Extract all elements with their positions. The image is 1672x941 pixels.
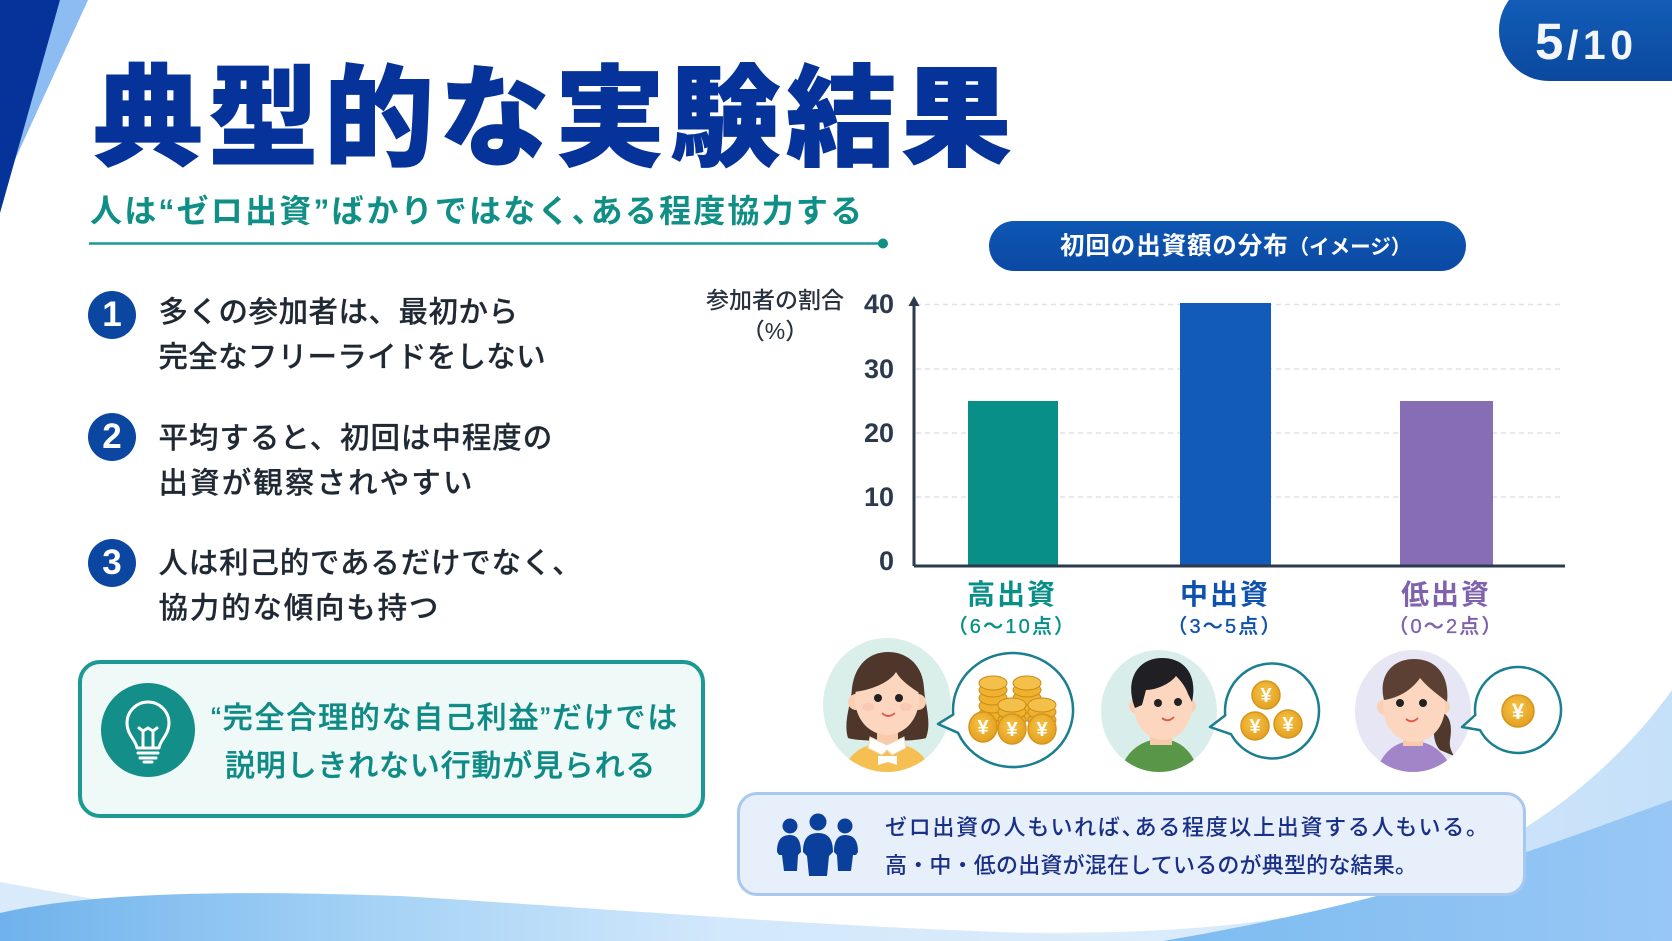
label: low: 低出資 <box>1401 579 1491 610</box>
icon: people <box>776 814 858 876</box>
speech bubble: many coins: ¥ <box>1006 719 1018 741</box>
speech bubble: many coins: ¥ <box>977 717 989 739</box>
axis numbers: 40 <box>864 289 894 319</box>
person: low contributor <box>1355 650 1471 775</box>
axis numbers: 30 <box>864 354 894 384</box>
page badge: /10 <box>1567 22 1638 68</box>
y axis label: （%） <box>742 318 808 344</box>
y axis label: 参加者の割合 <box>706 287 844 313</box>
category labels <box>948 579 1504 638</box>
speech bubble: three coins: ¥ <box>1249 716 1261 738</box>
speech bubble: three coins <box>1210 663 1319 758</box>
axis numbers: 0 <box>879 546 894 576</box>
point 2: 出資が観察されやすい <box>158 467 475 500</box>
person: middle contributor <box>1101 650 1217 775</box>
person: high contributor <box>823 638 951 775</box>
point 3 <box>88 539 582 625</box>
label: middle <box>1167 579 1283 638</box>
speech bubble: one coin <box>1462 667 1561 753</box>
axis arrow <box>908 296 920 306</box>
corner accent <box>0 0 88 213</box>
label: middle: 中出資 <box>1180 579 1270 610</box>
summary text: 高・中・低の出資が混在しているのが典型的な結果。 <box>885 853 1417 878</box>
callout text: 説明しきれない行動が見られる <box>225 750 656 783</box>
label: middle: （3～5点） <box>1167 616 1283 638</box>
chart title pill <box>989 221 1466 271</box>
list of key points <box>88 291 582 625</box>
axis numbers <box>864 289 894 576</box>
label: high: （6～10点） <box>948 616 1076 638</box>
callout text <box>211 702 679 783</box>
speech bubble: one coin: ¥ <box>1512 699 1525 724</box>
callout text: “完全合理的な自己利益”だけでは <box>211 702 679 735</box>
summary text <box>885 815 1490 878</box>
point 2: 平均すると、初回は中程度の <box>158 422 553 455</box>
point 3: 協力的な傾向も持つ <box>158 592 440 625</box>
bar: middle <box>1180 303 1271 565</box>
summary box <box>737 792 1526 896</box>
page badge: 5 <box>1535 13 1563 70</box>
callout: insight <box>78 660 705 818</box>
illustrations <box>823 638 1562 772</box>
point 2: 2 <box>102 417 122 456</box>
bar: high <box>968 401 1058 565</box>
label: high: 高出資 <box>967 579 1057 610</box>
speech bubble: many coins: ¥ <box>1036 719 1048 741</box>
subtitle: 人は“ゼロ出資”ばかりではなく、ある程度協力する <box>90 193 864 229</box>
point 1: 完全なフリーライドをしない <box>158 341 546 374</box>
point 1 <box>88 291 546 374</box>
y axis label <box>706 287 844 344</box>
page badge <box>1499 0 1672 81</box>
label: low <box>1388 579 1504 638</box>
speech bubble: three coins: ¥ <box>1282 714 1294 736</box>
point 1: 多くの参加者は、最初から <box>158 296 519 329</box>
icon: light bulb <box>101 683 195 777</box>
title: 典型的な実験結果 <box>93 58 1017 181</box>
subtitle rule <box>89 238 888 248</box>
point 3: 人は利己的であるだけでなく、 <box>158 547 582 580</box>
label: low: （0～2点） <box>1388 616 1504 638</box>
point 2 <box>88 413 553 500</box>
axis numbers: 10 <box>864 482 894 512</box>
bar: low <box>1400 401 1493 565</box>
axes <box>914 300 1565 566</box>
label: high <box>948 579 1076 638</box>
summary text: ゼロ出資の人もいれば、ある程度以上出資する人もいる。 <box>885 815 1490 840</box>
speech bubble: many coins <box>938 653 1073 767</box>
axis numbers: 20 <box>864 418 894 448</box>
point 3: 3 <box>102 543 122 582</box>
speech bubble: three coins: ¥ <box>1260 685 1272 707</box>
point 1: 1 <box>102 295 122 334</box>
chart title pill: 初回の出資額の分布（イメージ） <box>1060 233 1411 260</box>
